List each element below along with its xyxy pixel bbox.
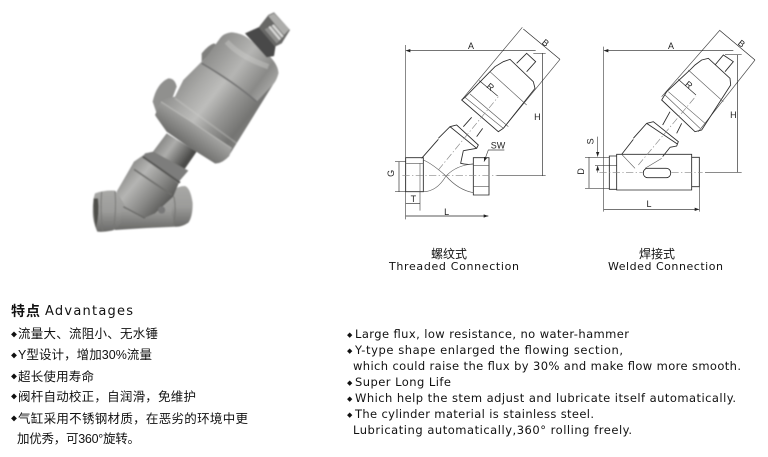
caption: threaded connection: 螺纹式: [431, 247, 467, 261]
left hex nut: [93, 191, 122, 232]
dimension labels: D: [576, 168, 586, 175]
text block: chinese advantages: ◆: [11, 353, 17, 360]
text block: english advantages: Which help the stem adjust and lubricate itself automatically.: [355, 391, 736, 405]
text block: chinese advantages: ◆: [11, 394, 17, 401]
heading: advantages: Advantages: [45, 304, 133, 319]
dimension labels: G: [386, 170, 396, 177]
text block: english advantages: Lubricating automatically,360° rolling freely.: [353, 423, 632, 437]
dimension labels: [576, 38, 747, 209]
dimension labels: T: [411, 194, 417, 204]
dimension labels: H: [730, 110, 737, 120]
diagram: threaded connection: [386, 27, 560, 219]
dimension labels: L: [646, 199, 651, 209]
text block: english advantages: ◆: [347, 379, 353, 387]
dimension arrows: [589, 31, 755, 209]
text block: chinese advantages: 流量大、流阻小、无水锤: [18, 326, 158, 341]
text block: chinese advantages: ◆: [11, 332, 17, 339]
text block: english advantages: [347, 327, 741, 437]
dimension labels: A: [468, 41, 474, 51]
dimension labels: R: [683, 79, 695, 91]
heading: advantages: 特点: [11, 303, 40, 319]
text block: english advantages: The cylinder material is stainless steel.: [354, 407, 594, 421]
top indicator knob: [245, 27, 276, 57]
text block: english advantages: Y-type shape enlarged the flowing section,: [354, 343, 623, 357]
text block: english advantages: ◆: [347, 411, 353, 419]
center lines: [599, 96, 703, 173]
text block: chinese advantages: 阀杆自动校正，自润滑，免维护: [18, 389, 196, 404]
photo: stainless angle seat valve: [93, 12, 290, 232]
dimension labels: L: [444, 207, 449, 217]
caption: welded connection: [608, 246, 723, 273]
text block: chinese advantages: [11, 326, 248, 446]
caption: threaded connection: [388, 247, 519, 273]
text block: english advantages: Super Long Life: [355, 375, 451, 389]
top dome: [202, 32, 278, 102]
extension lines: [585, 30, 755, 212]
dimension labels: B: [540, 37, 551, 49]
lower rim band: [155, 102, 232, 163]
dimension labels: B: [736, 38, 747, 49]
text block: english advantages: Large flux, low resistance, no water-hammer: [355, 327, 629, 341]
dimension labels: H: [534, 112, 541, 122]
dimension labels: S: [585, 138, 595, 144]
valve outline welded: [662, 55, 733, 132]
text block: english advantages: ◆: [347, 395, 353, 403]
marking on body: [158, 206, 165, 214]
valve outline threaded: [462, 53, 536, 132]
extension lines: [395, 27, 560, 219]
caption: welded connection: 焊接式: [639, 246, 675, 261]
dimension arrows: [399, 29, 560, 216]
caption: welded connection: Welded Connection: [608, 260, 723, 273]
text block: english advantages: ◆: [347, 347, 353, 355]
dimension labels: SW: [491, 141, 506, 151]
text block: chinese advantages: 超长使用寿命: [18, 369, 94, 384]
text block: chinese advantages: ◆: [11, 416, 17, 423]
text block: english advantages: ◆: [347, 331, 353, 339]
text block: chinese advantages: ◆: [11, 374, 17, 381]
text block: english advantages: which could raise the flux by 30% and make flow more smooth.: [353, 359, 741, 373]
dimension labels: R: [485, 81, 497, 93]
dimension labels: A: [668, 41, 674, 51]
right hex nut: [172, 186, 193, 227]
text block: chinese advantages: 加优秀，可360°旋转。: [17, 431, 140, 446]
cylinder: [156, 32, 278, 163]
center lines: [402, 97, 498, 176]
neck: [152, 133, 197, 173]
lower stem: [117, 154, 181, 218]
valve body pipe: [110, 191, 177, 230]
caption: threaded connection: Threaded Connection: [388, 260, 519, 273]
text block: chinese advantages: Y型设计，增加30%流量: [18, 347, 152, 362]
text block: chinese advantages: 气缸采用不锈钢材质，在恶劣的环境中更: [18, 411, 248, 426]
dimension labels: [386, 37, 551, 217]
heading: advantages: [11, 303, 133, 319]
side ports: [153, 78, 177, 113]
diagram: welded connection: [576, 30, 755, 212]
